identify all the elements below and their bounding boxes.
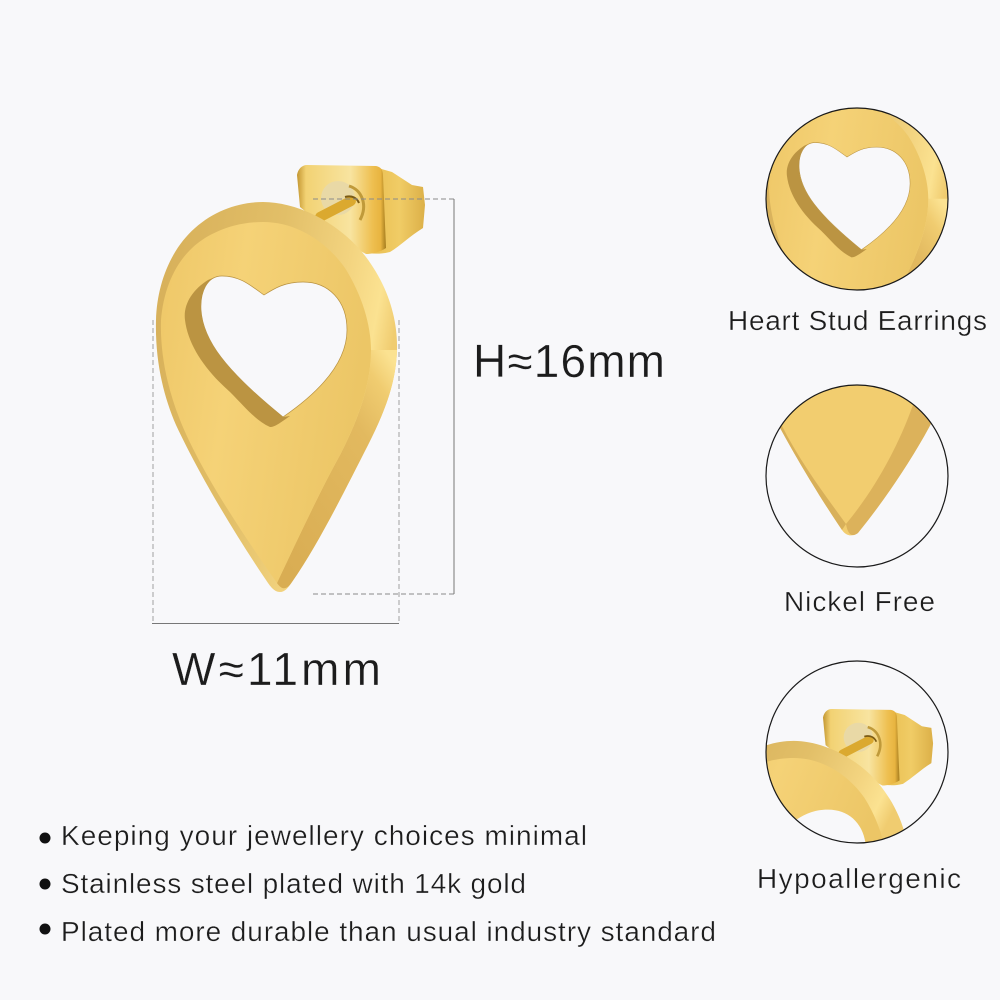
detail circle: post and back [765,660,949,844]
width dimension bracket [152,320,399,624]
detail circle: pointed tip [766,370,948,567]
width label: W≈11mm [172,643,381,695]
label: Hypoallergenic: Hypoallergenic [757,863,961,894]
feature list [40,820,716,947]
height dimension bracket [313,199,454,594]
height label: H≈16mm [473,335,665,387]
bullet 2: Stainless steel plated with 14k gold [61,868,526,899]
label: Nickel Free: Nickel Free [784,586,935,617]
bullet 1: Keeping your jewellery choices minimal [61,820,587,851]
main earring photo [156,165,425,592]
bullet 3: Plated more durable than usual industry standard [61,916,716,947]
label: Heart Stud Earrings: Heart Stud Earrings [728,305,987,336]
detail circle: heart cut-out [765,107,949,291]
